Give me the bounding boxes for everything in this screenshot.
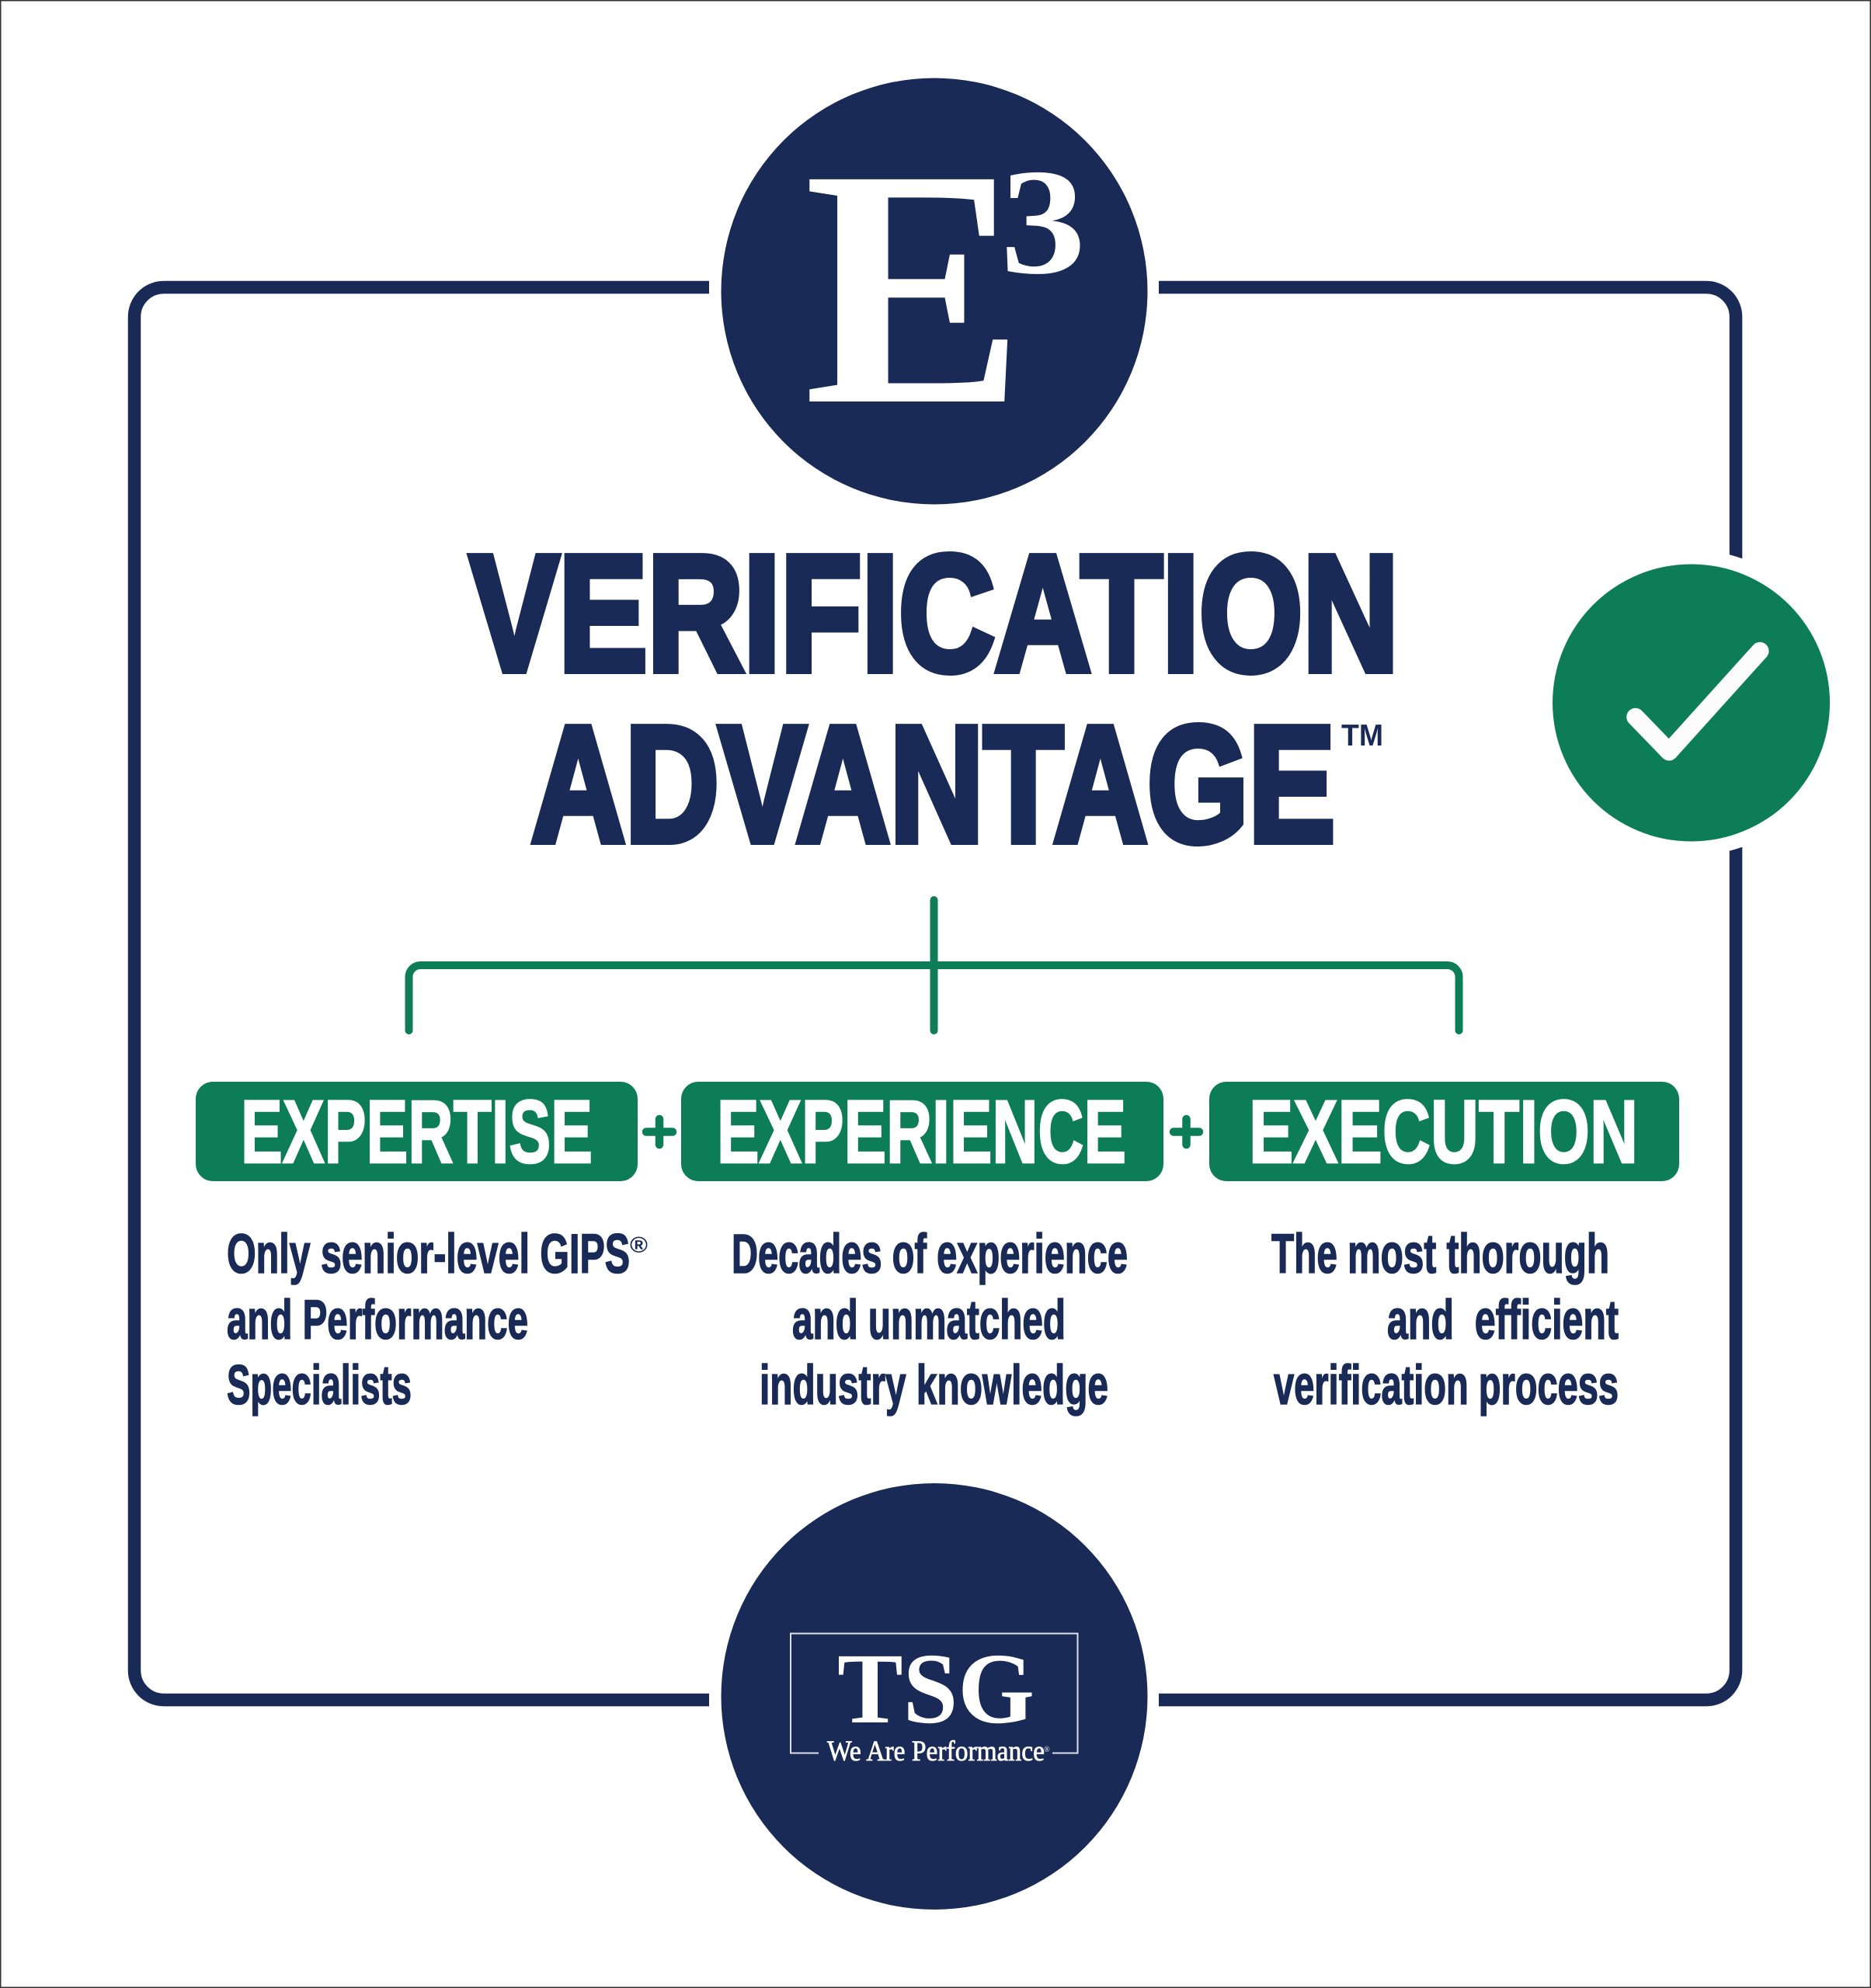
title line 1: VERIFICATION <box>470 521 1399 705</box>
check mark badge <box>1538 550 1844 856</box>
E3 badge <box>721 78 1148 505</box>
heading: expertise: EXPERTISE <box>241 1083 593 1182</box>
text block: expertise description: and Performance <box>227 1290 528 1351</box>
heading: experience: EXPERIENCE <box>717 1083 1126 1182</box>
registered mark: ® <box>1044 1746 1050 1754</box>
text block: execution description: verification process <box>1274 1355 1619 1416</box>
text block: execution description: and efficient <box>1387 1290 1619 1351</box>
text block: expertise description: Specialists <box>227 1355 412 1416</box>
logo frame <box>791 1634 1078 1753</box>
TSG logo badge <box>721 1483 1148 1910</box>
icon: plus one <box>646 1119 673 1145</box>
heading: execution: EXECUTION <box>1249 1083 1638 1182</box>
trademark: TM <box>1341 719 1383 752</box>
superscript 3: 3 <box>1000 138 1086 306</box>
logo wordmark: TSG <box>837 1633 1035 1745</box>
text block: experience description: Decades of experience <box>732 1224 1128 1285</box>
text block: experience description: industry knowledge <box>760 1355 1108 1416</box>
panel: expertise <box>196 1082 638 1182</box>
text block: experience description: and unmatched <box>792 1290 1066 1351</box>
text block: experience description <box>732 1224 1128 1416</box>
logo tagline: We Are Performance <box>827 1736 1045 1767</box>
title <box>470 521 1399 876</box>
panel: execution <box>1209 1082 1679 1182</box>
icon: check mark <box>1636 651 1760 752</box>
icon: plus two <box>1174 1119 1199 1145</box>
text block: expertise description: Only senior-level GIPS <box>227 1224 630 1285</box>
outer rounded frame <box>134 287 1736 1700</box>
text block: expertise description <box>227 1224 648 1416</box>
bracket connector <box>409 900 1459 1030</box>
text block: execution description: The most thorough <box>1271 1224 1609 1285</box>
title line 2: ADVANTAGE <box>531 692 1335 876</box>
text block: execution description <box>1271 1224 1619 1416</box>
letter E: E <box>804 99 1024 475</box>
panel: experience <box>681 1082 1163 1182</box>
text block: expertise description: ® <box>630 1233 648 1258</box>
